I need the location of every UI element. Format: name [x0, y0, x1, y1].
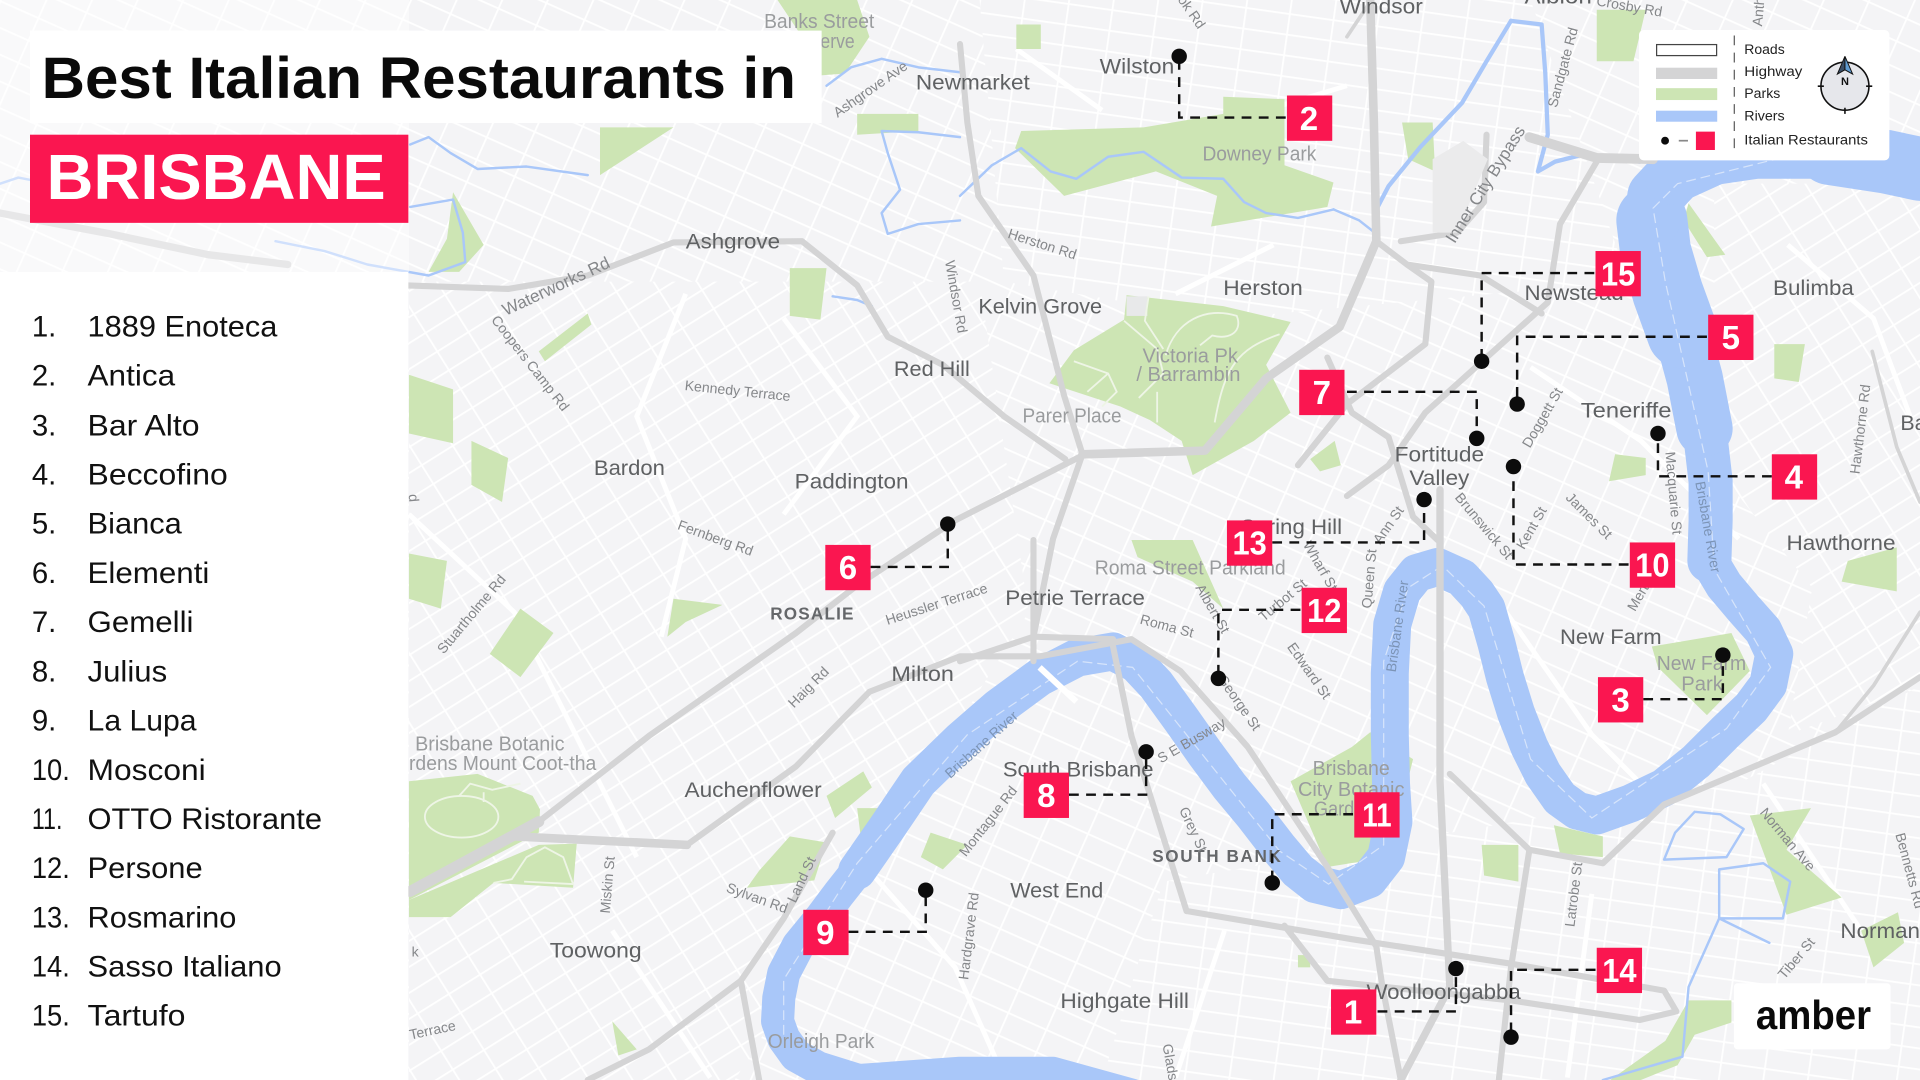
- suburb labels: Toowong: [550, 939, 642, 963]
- marker 15: [1596, 251, 1641, 296]
- road labels: Edward St: [1284, 639, 1335, 702]
- panel: restaurant list: 10.: [32, 754, 70, 787]
- marker 2: [1287, 96, 1332, 141]
- suburb labels: Auchenflower: [684, 778, 822, 802]
- panel: restaurant list: 11.: [32, 803, 62, 836]
- marker 1: 1: [1344, 995, 1362, 1032]
- suburb labels: Banks Street: [764, 11, 875, 33]
- panel: restaurant list: Antica: [88, 360, 176, 393]
- panel: restaurant list: Bianca: [88, 507, 183, 540]
- legend swatches: [1656, 45, 1717, 150]
- marker 8: 8: [1037, 778, 1056, 815]
- legend labels: Parks: [1744, 85, 1780, 101]
- road labels: Roma St: [1138, 611, 1196, 641]
- road labels: Turbot St: [1255, 575, 1310, 624]
- road labels: k: [412, 943, 420, 959]
- road labels: Ashgrove Ave: [830, 57, 910, 120]
- panel: restaurant list: Gemelli: [88, 606, 193, 639]
- road labels: Brunswick St: [1452, 489, 1517, 562]
- marker 12: [1302, 588, 1347, 633]
- city heading: BRISBANE: [47, 142, 386, 213]
- panel: restaurant list: Rosmarino: [88, 902, 236, 935]
- panel: restaurant list: 13.: [32, 902, 70, 935]
- panel: restaurant list: 4.: [32, 458, 56, 491]
- suburb labels: Roma Street Parkland: [1095, 557, 1286, 579]
- suburb labels: rdens Mount Coot-tha: [409, 753, 597, 775]
- road labels: Queen St: [1358, 548, 1379, 609]
- panel: restaurant list: 1889 Enoteca: [88, 311, 278, 344]
- suburb labels: Victoria Pk: [1142, 345, 1239, 367]
- title: [30, 31, 822, 123]
- marker 7: 7: [1313, 375, 1331, 412]
- legend labels: Roads: [1744, 41, 1785, 57]
- suburb labels: Paddington: [795, 470, 909, 494]
- panel: restaurant list: La Lupa: [88, 704, 197, 737]
- road labels: Miskin St: [597, 856, 618, 914]
- road labels: James St: [1563, 489, 1616, 542]
- marker 3: [1598, 677, 1643, 722]
- parks: [409, 0, 1904, 1080]
- panel: restaurant list: Persone: [88, 852, 203, 885]
- panel: restaurant list: 9.: [32, 704, 56, 737]
- road labels: Wharf St: [1300, 538, 1341, 593]
- panel: restaurant list: 1.: [32, 311, 56, 344]
- marker 13: [1227, 520, 1272, 566]
- marker 2: 2: [1300, 101, 1318, 138]
- marker 9: 9: [816, 915, 835, 952]
- marker 5: 5: [1722, 320, 1740, 357]
- title: Best Italian Restaurants in: [42, 46, 796, 111]
- restaurant location dots: [918, 49, 1731, 1045]
- suburb labels: New Farm: [1560, 625, 1662, 649]
- legend labels: Highway: [1744, 63, 1803, 79]
- bridge: [1040, 667, 1076, 702]
- suburb labels: Herston: [1223, 276, 1303, 300]
- road labels: Macquarie St: [1662, 451, 1686, 535]
- marker 10: 10: [1635, 548, 1670, 585]
- suburb labels: erve: [820, 31, 855, 53]
- marker 5: [1708, 315, 1753, 360]
- numbered markers: [803, 96, 1817, 1035]
- road labels: Hardgrave Rd: [955, 892, 982, 981]
- suburb labels: Gard: [1314, 799, 1354, 821]
- suburb labels: ROSALIE: [770, 604, 853, 624]
- panel: legend: [1639, 30, 1889, 160]
- marker 6: 6: [839, 550, 857, 587]
- panel: restaurant list: 6.: [32, 557, 56, 590]
- road labels: Montague Rd: [956, 783, 1020, 859]
- panel: restaurant list: Tartufo: [88, 1000, 186, 1033]
- panel: restaurant list: 14.: [32, 951, 70, 984]
- suburb labels: Woolloongabba: [1367, 980, 1521, 1004]
- suburb labels: SOUTH BANK: [1152, 846, 1281, 866]
- marker 3: 3: [1611, 682, 1630, 719]
- road labels: Fernberg Rd: [676, 517, 755, 559]
- main river lower reach: [778, 871, 857, 1080]
- marker 14: [1597, 948, 1642, 993]
- marker 12: 12: [1307, 593, 1341, 630]
- suburb labels: Spring Hill: [1240, 515, 1342, 539]
- road labels: Coopers Camp Rd: [488, 312, 573, 414]
- panel: restaurant list: 8.: [32, 655, 56, 688]
- suburb labels: Petrie Terrace: [1005, 586, 1145, 610]
- suburb labels: West End: [1010, 879, 1103, 903]
- road labels: Sylvan Rd: [724, 879, 790, 916]
- panel: restaurant list: Beccofino: [88, 458, 228, 491]
- marker 4: [1772, 454, 1817, 500]
- legend labels: Italian Restaurants: [1744, 131, 1868, 147]
- icon: compass: [1818, 56, 1872, 114]
- road labels: Land St: [784, 854, 819, 905]
- suburb labels: Norman: [1840, 919, 1920, 943]
- suburb labels: Newmarket: [916, 70, 1030, 94]
- legend labels: [1744, 41, 1868, 147]
- main river middle reach: [857, 561, 1774, 890]
- marker 6: [825, 545, 871, 590]
- suburb labels: Valley: [1409, 466, 1470, 490]
- road labels: Brisbane River: [1383, 579, 1411, 673]
- road labels: Terrace: [408, 1017, 457, 1043]
- road labels: [406, 0, 1920, 1080]
- road labels: Norman Ave: [1757, 805, 1819, 874]
- road labels: d: [406, 493, 422, 503]
- marker 11: 11: [1362, 798, 1392, 835]
- panel: restaurant list: OTTO Ristorante: [88, 803, 322, 836]
- road labels: Hawthorne Rd: [1847, 384, 1873, 475]
- marker 9: [803, 910, 849, 955]
- suburb labels: Brisbane: [1313, 758, 1390, 780]
- suburb labels: Ashgrove: [686, 230, 780, 254]
- marker 7: [1299, 370, 1344, 415]
- road labels: Brisbane River: [1692, 480, 1724, 574]
- panel: restaurant list: [0, 272, 408, 1080]
- suburb labels: Orleigh Park: [768, 1031, 875, 1053]
- bottom river: [857, 1070, 1133, 1080]
- road labels: Brisbane River: [941, 707, 1021, 781]
- panel: restaurant list: Sasso Italiano: [88, 951, 282, 984]
- road labels: Tiber St: [1774, 934, 1818, 982]
- river channel marks: [784, 159, 1776, 1035]
- faded map overlay: [0, 0, 409, 272]
- marker 13: 13: [1232, 526, 1267, 563]
- panel: restaurant list: Elementi: [88, 557, 209, 590]
- panel: restaurant list: 12.: [32, 852, 70, 885]
- road labels: Herston Rd: [1006, 225, 1079, 262]
- marker 1: [1331, 989, 1376, 1035]
- road labels: Kennedy Terrace: [684, 377, 791, 404]
- marker 15: 15: [1601, 256, 1635, 293]
- legend labels: Rivers: [1744, 108, 1785, 124]
- marker 10: [1630, 542, 1675, 588]
- suburb labels: Red Hill: [894, 357, 970, 381]
- main river upper reach: [1704, 429, 1711, 561]
- suburb labels: Bulimba: [1773, 276, 1854, 300]
- road labels: Ann St: [1369, 503, 1407, 547]
- road labels: Albert St: [1192, 581, 1233, 636]
- road labels: Doggett St: [1519, 385, 1566, 450]
- suburb labels: Fortitude: [1395, 443, 1484, 467]
- icon: compass: N: [1841, 76, 1849, 88]
- road labels: George St: [1215, 672, 1265, 733]
- suburb labels: Highgate Hill: [1060, 989, 1189, 1013]
- panel: restaurant list: 7.: [32, 606, 56, 639]
- suburb labels: Newstead: [1524, 281, 1624, 305]
- suburb labels: Kelvin Grove: [978, 294, 1102, 318]
- panel: restaurant list: 3.: [32, 409, 56, 442]
- logo: amber: amber: [1756, 992, 1871, 1038]
- road labels: Kent St: [1513, 504, 1550, 552]
- logo: amber: [1734, 983, 1891, 1049]
- road labels: Stuartholme Rd: [434, 571, 509, 657]
- suburb labels: Parer Place: [1022, 405, 1122, 427]
- panel: restaurant list: Julius: [88, 655, 167, 688]
- road labels: Merthyr: [1624, 564, 1662, 614]
- suburb labels: Wilston: [1100, 54, 1174, 78]
- major white streets: [409, 49, 1910, 1078]
- suburb labels: Downey Park: [1202, 143, 1317, 165]
- road labels: Sandgate Rd: [1544, 26, 1581, 109]
- marker leader lines: [849, 64, 1772, 1030]
- road labels: Latrobe St: [1562, 861, 1585, 928]
- road labels: Heussler Terrace: [883, 580, 990, 628]
- suburb labels: Park: [1681, 674, 1724, 696]
- panel: restaurant list: Bar Alto: [88, 409, 200, 442]
- panel: restaurant list: 2.: [32, 360, 56, 393]
- panel: restaurant list: 15.: [32, 1000, 70, 1033]
- suburb labels: [409, 0, 1920, 1053]
- suburb labels: Teneriffe: [1581, 399, 1671, 423]
- panel: restaurant list: 5.: [32, 507, 56, 540]
- marker 4: 4: [1785, 460, 1804, 497]
- suburb labels: New Farm: [1657, 653, 1746, 675]
- suburb labels: Bardon: [594, 456, 665, 480]
- marker 11: [1354, 792, 1400, 838]
- marker 14: 14: [1602, 953, 1637, 990]
- suburb labels: Hawthorne: [1787, 531, 1896, 555]
- park paths: [425, 296, 1280, 884]
- suburb labels: / Barrambin: [1136, 364, 1240, 386]
- road labels: S E Busway: [1155, 714, 1229, 766]
- suburb labels: Brisbane Botanic: [415, 734, 564, 756]
- suburb labels: City Botanic: [1298, 779, 1404, 801]
- road labels: Grey St: [1176, 804, 1211, 854]
- marker 8: [1024, 773, 1069, 818]
- road labels: Waterworks Rd: [499, 252, 613, 320]
- suburb labels: South Brisbane: [1003, 757, 1153, 781]
- suburb labels: Milton: [891, 662, 954, 686]
- road labels: Windsor Rd: [942, 259, 971, 334]
- road labels: Inner City Bypass: [1441, 122, 1529, 246]
- panel: restaurant list: Mosconi: [88, 754, 206, 787]
- road labels: Haig Rd: [785, 663, 832, 711]
